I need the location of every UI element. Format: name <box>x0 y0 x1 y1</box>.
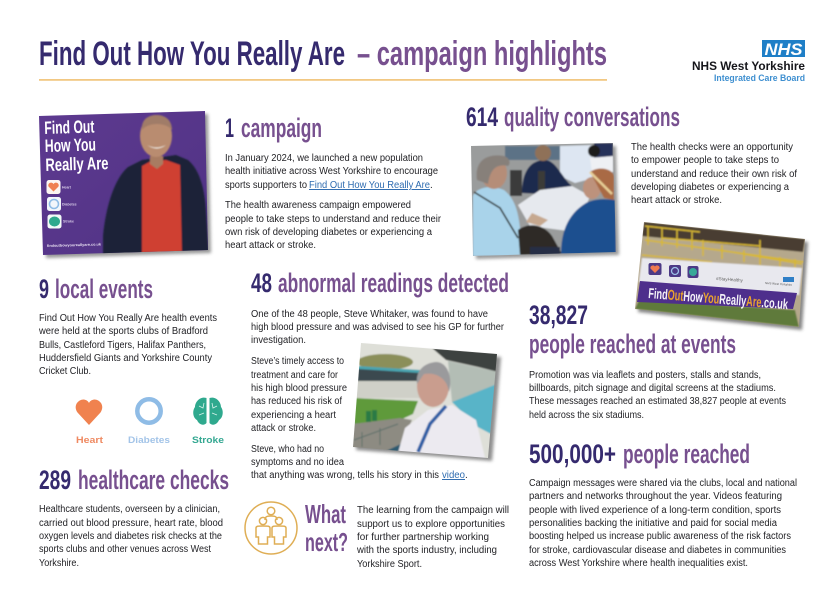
body text: . <box>465 470 468 481</box>
body text: attack or stroke. <box>251 423 316 434</box>
heading: 9 <box>39 274 49 304</box>
body text: Huddersfield Giants and Yorkshire County <box>39 353 212 364</box>
health check photo <box>465 140 620 260</box>
body text: high blood pressure and was advised to see his GP for further <box>251 322 505 333</box>
body text: Steve’s timely access to <box>251 356 344 367</box>
body text: In January 2024, we launched a new population <box>225 153 423 164</box>
body text: Find Out How You Really Are <box>309 180 431 191</box>
poster icons: findoutbowyoureallyare.co.uk <box>47 242 101 248</box>
heading: campaign <box>241 113 322 143</box>
body text: heart attack or stroke. <box>631 195 722 206</box>
heading: 289 <box>39 465 71 495</box>
heading: 1 <box>225 113 234 143</box>
title: Find Out How You Really Are <box>39 35 345 73</box>
heading <box>529 300 736 359</box>
body text: carried out blood pressure, heart rate, blood <box>39 518 223 529</box>
heading <box>225 113 322 143</box>
poster headline: Find Out <box>44 117 95 138</box>
what next heading <box>305 499 348 557</box>
body text: that anything was wrong, tells his story in this <box>251 470 439 481</box>
body text: heart attack or stroke. <box>225 240 316 251</box>
banner icons: #StayHealthy <box>716 276 744 283</box>
body text: understand and reduce their own risk of <box>631 169 797 180</box>
body text <box>251 309 505 481</box>
banner text: FindOutHowYouReallyAre.co.uk <box>648 286 789 313</box>
icon: heart: Heart <box>76 435 104 446</box>
body text: sports supporters to <box>225 180 308 191</box>
body text: treatment and care for <box>251 370 339 381</box>
Steve photo <box>353 343 503 463</box>
body text: video <box>442 470 466 481</box>
body text: people with lived experience of a long-term condition, sports <box>529 505 781 516</box>
body text: billboards, pitch signage and digital screens at the stadiums. <box>529 383 776 394</box>
body text <box>356 505 509 570</box>
heading <box>251 268 509 298</box>
body text: support us to explore opportunities <box>357 519 505 530</box>
section: 9 local events <box>38 274 224 446</box>
poster icons: Diabetes <box>62 202 77 206</box>
heading: healthcare checks <box>78 465 229 495</box>
body text: The learning from the campaign will <box>357 505 509 516</box>
body text: for further partnership working <box>357 532 489 543</box>
body text: were held at the sports clubs of Bradford <box>38 326 208 337</box>
body text <box>225 153 442 251</box>
body text: personalities backing the initiative and paid for social media <box>529 518 778 529</box>
icon: stroke brain <box>192 398 224 446</box>
section: 38,827 people reached at events <box>529 300 786 421</box>
heading: 500,000+ <box>529 439 616 469</box>
body text: Cricket Club. <box>39 366 91 377</box>
body text <box>39 504 223 569</box>
heading: people reached <box>623 439 750 469</box>
NHS logo: NHS <box>764 40 803 59</box>
body text: Healthcare students, overseen by a clinician, <box>39 504 220 515</box>
body text: sports clubs and other venues across West <box>39 544 211 555</box>
section: 48 abnormal readings detected <box>251 268 509 481</box>
poster headline: Really Are <box>45 153 109 175</box>
banner icons <box>648 263 794 287</box>
body text: One of the 48 people, Steve Whitaker, was found to have <box>251 309 489 320</box>
body text: Yorkshire Sport. <box>357 559 422 570</box>
icon: heart <box>76 399 104 446</box>
body text: Steve, who had no <box>251 444 324 455</box>
body text: Yorkshire. <box>39 558 79 569</box>
section: 614 quality conversations <box>465 102 810 335</box>
body text: oxygen levels and diabetes risk checks at the <box>39 531 223 542</box>
title: – campaign highlights <box>357 35 607 73</box>
stadium banner photo <box>635 222 810 332</box>
poster icons: Heart <box>62 186 72 190</box>
body text: boosting helped us increase public awareness of the risk factors <box>529 531 791 542</box>
section: 289 healthcare checks <box>39 465 229 569</box>
body text: health initiative across West Yorkshire to encourage <box>225 166 439 177</box>
body text <box>38 313 217 377</box>
heading <box>39 274 153 304</box>
icon: diabetes <box>128 399 170 446</box>
heading <box>466 102 680 132</box>
heading: abnormal readings detected <box>278 268 509 298</box>
body text <box>631 142 797 206</box>
icon: people in a circle <box>245 502 297 554</box>
poster icons <box>46 180 101 248</box>
NHS logo <box>692 40 805 83</box>
icon: diabetes: Diabetes <box>128 435 170 446</box>
body text: partners and networks throughout the year. Videos featuring <box>529 491 782 502</box>
body text: his high blood pressure <box>251 383 348 394</box>
section: 1 campaign <box>225 113 442 251</box>
heading: 38,827 <box>529 300 588 330</box>
body text: The health checks were an opportunity <box>631 142 793 153</box>
section: what next <box>245 499 509 570</box>
body text: The health awareness campaign empowered <box>225 200 411 211</box>
body text: people to take steps to understand and reduce their <box>225 214 442 225</box>
body text: investigation. <box>251 335 306 346</box>
body text: . <box>430 180 433 191</box>
poster photo <box>35 105 215 260</box>
body text: symptoms and no idea <box>251 457 345 468</box>
what next heading: What <box>305 499 346 529</box>
poster icons: Stroke <box>63 220 74 224</box>
heading <box>529 439 750 469</box>
heading: 48 <box>251 268 272 298</box>
body text: own risk of developing diabetes or experiencing a <box>225 227 433 238</box>
body text: These messages reached an estimated 38,827 people at events <box>529 396 786 407</box>
poster headline <box>44 116 109 175</box>
body text: Promotion was via leaflets and posters, stalls and stands, <box>529 370 761 381</box>
heading: local events <box>55 274 153 304</box>
body text: for stroke, cardiovascular disease and diabetes in communities <box>529 545 786 556</box>
body text: Find Out How You Really Are health events <box>39 313 217 324</box>
body text: held across the six stadiums. <box>529 410 644 421</box>
poster headline: How You <box>45 134 96 156</box>
what next heading: next? <box>305 527 348 557</box>
banner icons: NHS West Yorkshire <box>765 281 793 287</box>
heading: quality conversations <box>504 102 680 132</box>
body text: Bulls, Castleford Tigers, Halifax Panthers, <box>39 340 206 351</box>
body text: with the sports industry, including <box>356 545 497 556</box>
body text: developing diabetes or experiencing a <box>631 182 790 193</box>
heading: 614 <box>466 102 498 132</box>
body text: experiencing a heart <box>251 410 336 421</box>
NHS logo: NHS West Yorkshire <box>692 61 805 73</box>
body text <box>529 478 797 569</box>
body text: has reduced his risk of <box>251 396 342 407</box>
body text: Campaign messages were shared via the clubs, local and national <box>529 478 797 489</box>
section: 500,000+ people reached <box>529 439 797 569</box>
heading <box>39 465 229 495</box>
icon: stroke brain: Stroke <box>192 435 224 446</box>
NHS logo: Integrated Care Board <box>714 73 805 83</box>
body text <box>529 370 786 421</box>
body text: across West Yorkshire where health inequalities exist. <box>529 558 748 569</box>
body text: to empower people to take steps to <box>631 155 780 166</box>
